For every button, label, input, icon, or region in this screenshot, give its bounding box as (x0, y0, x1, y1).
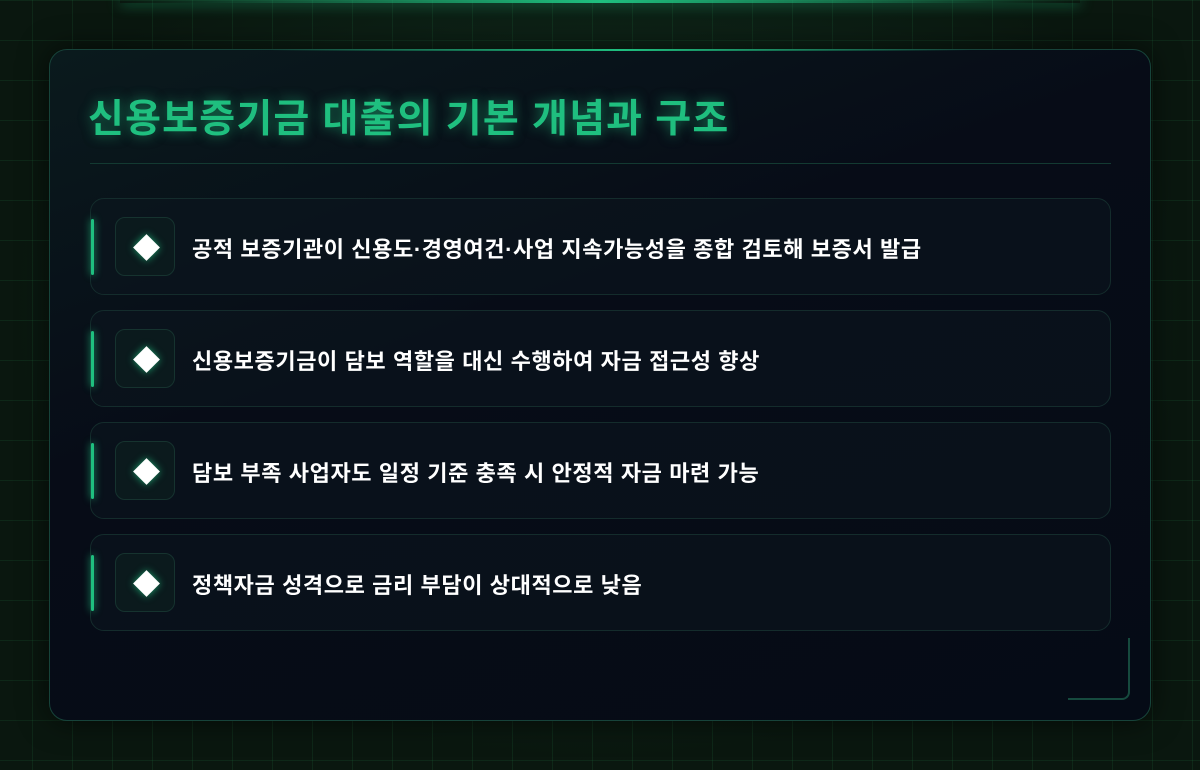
item 2 (90, 310, 1111, 407)
item 3: 담보 부족 사업자도 일정 기준 충족 시 안정적 자금 마련 가능 (192, 461, 759, 486)
item 4: 정책자금 성격으로 금리 부담이 상대적으로 낮음 (192, 573, 642, 598)
item 3 (90, 422, 1111, 519)
item 4 (90, 534, 1111, 631)
item 1: 공적 보증기관이 신용도·경영여건·사업 지속가능성을 종합 검토해 보증서 발급 (192, 237, 922, 262)
title: 신용보증기금 대출의 기본 개념과 구조 (88, 98, 729, 141)
item 1 (90, 198, 1111, 295)
item 2: 신용보증기금이 담보 역할을 대신 수행하여 자금 접근성 향상 (192, 349, 760, 374)
